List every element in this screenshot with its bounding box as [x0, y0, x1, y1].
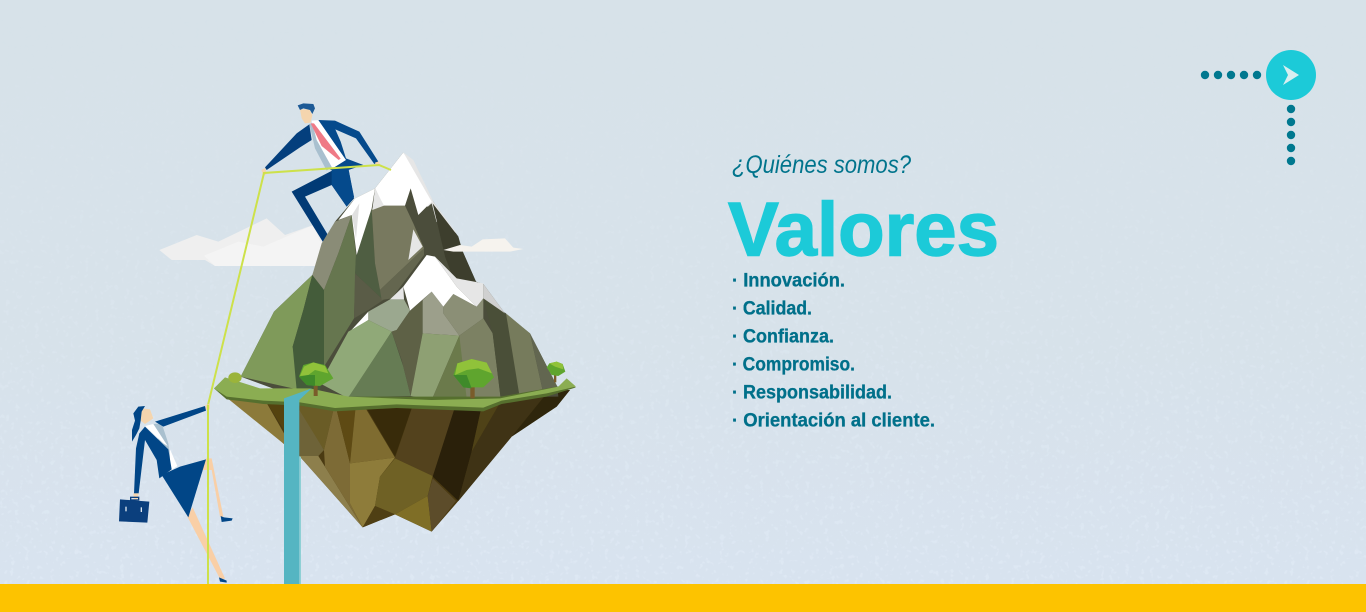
clouds behind mountain: [159, 218, 330, 266]
main heading: Valores: [728, 188, 999, 272]
right small cloud: [443, 238, 523, 252]
woman climbing: [119, 404, 233, 583]
floating island: [214, 152, 576, 584]
subtitle: ¿Quiénes somos?: [732, 151, 911, 179]
island underside rock: [227, 390, 570, 532]
mountain: [241, 152, 558, 400]
values list: [732, 270, 935, 432]
tree centre: [453, 359, 494, 398]
values list: · Orientación al cliente.: [732, 410, 935, 432]
tree left: [299, 362, 333, 396]
grass top: [214, 372, 576, 411]
values list: · Innovación.: [732, 270, 845, 292]
rope vertical: [207, 405, 209, 584]
yellow footer bar: [0, 584, 1366, 612]
values list: · Responsabilidad.: [732, 382, 892, 404]
values list: · Confianza.: [732, 326, 834, 348]
values list: · Compromiso.: [732, 354, 855, 376]
tree right: [547, 362, 565, 382]
values list: · Calidad.: [732, 298, 812, 320]
climbing rope: [208, 165, 391, 405]
man climbing: [261, 103, 381, 243]
waterfall: [284, 388, 312, 584]
dotted navigation arrow: [1201, 50, 1316, 165]
